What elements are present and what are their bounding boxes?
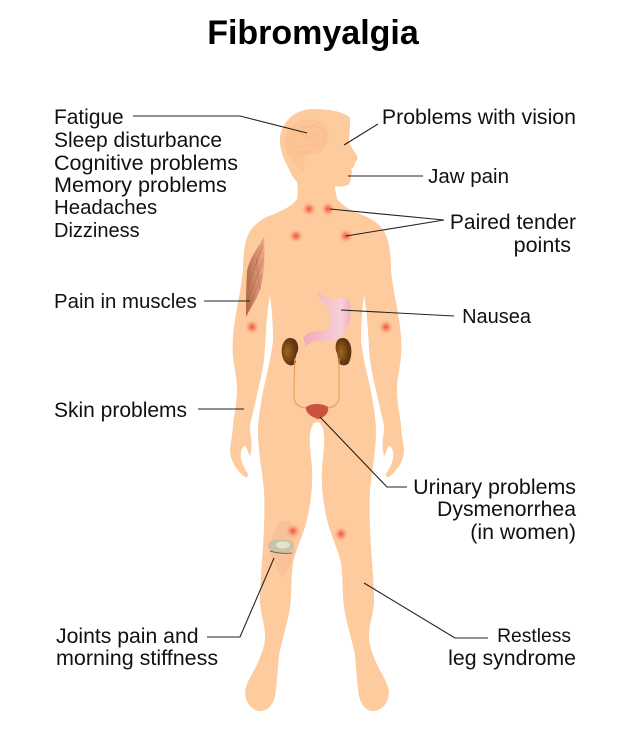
leader: skin xyxy=(198,408,244,410)
leader: joints xyxy=(207,558,274,637)
text: paired tender points: Paired tender xyxy=(450,211,576,234)
leader: vision xyxy=(344,124,378,145)
leader: muscles xyxy=(204,300,250,302)
text: joints pain xyxy=(56,625,218,670)
text: joints pain: morning stiffness xyxy=(56,646,218,670)
icon: kidneys xyxy=(282,338,351,365)
icon: arm muscle xyxy=(246,237,265,317)
human body silhouette xyxy=(230,109,404,711)
title: Fibromyalgia xyxy=(207,14,420,52)
icon: brain xyxy=(285,119,328,173)
text: brain symptoms: Sleep disturbance xyxy=(54,129,222,152)
text: brain symptoms xyxy=(54,106,238,242)
text: pain in muscles: Pain in muscles xyxy=(54,291,197,313)
text: urinary problems: Urinary problems xyxy=(413,475,576,499)
leader: fatigue to brain xyxy=(133,116,307,133)
text: brain symptoms: Headaches xyxy=(54,197,157,219)
icon: stomach xyxy=(303,292,351,346)
text: restless leg syndrome: leg syndrome xyxy=(448,646,576,670)
leader: jaw xyxy=(348,175,423,177)
leader: paired tender points xyxy=(330,209,444,236)
leader: nausea xyxy=(341,310,454,316)
text: nausea: Nausea xyxy=(462,306,532,328)
icon: bladder xyxy=(306,404,328,419)
text: problems with vision: Problems with vision xyxy=(382,105,576,129)
text: brain symptoms: Memory problems xyxy=(54,172,227,197)
text: joints pain: Joints pain and xyxy=(56,625,199,648)
text: skin problems: Skin problems xyxy=(54,399,187,422)
text: paired tender points xyxy=(450,211,576,257)
icon: knee joint xyxy=(268,520,295,578)
text: restless leg syndrome: Restless xyxy=(497,626,571,647)
text: restless leg syndrome xyxy=(448,626,576,670)
text: paired tender points: points xyxy=(514,233,571,257)
leader: restless leg xyxy=(364,583,488,638)
text: urinary problems xyxy=(413,475,576,544)
icon: ureters xyxy=(294,358,339,408)
text: brain symptoms: Fatigue xyxy=(54,106,124,129)
tender points xyxy=(244,201,394,542)
leader: urinary xyxy=(320,417,407,487)
text: brain symptoms: Dizziness xyxy=(54,220,140,242)
text: brain symptoms: Cognitive problems xyxy=(54,151,238,175)
text: urinary problems: Dysmenorrhea xyxy=(437,498,576,521)
text: jaw pain: Jaw pain xyxy=(428,165,509,188)
text: urinary problems: (in women) xyxy=(470,520,576,544)
